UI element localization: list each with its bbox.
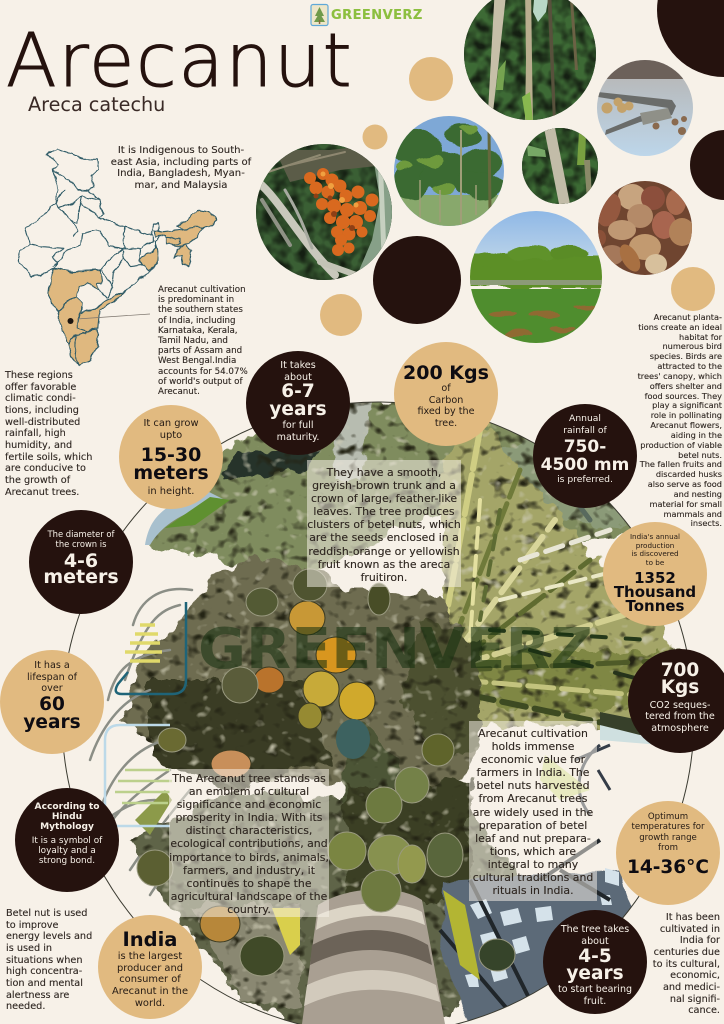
decorative dark circle top right — [657, 0, 724, 77]
stat bubble: India largest producer: producer and — [117, 963, 183, 974]
text box: cultural significance: distinct characteristics, — [186, 824, 312, 837]
stat bubble: years to bearing fruit: about — [581, 936, 609, 947]
stat bubble: annual rainfall: rainfall of — [563, 425, 607, 436]
stat bubble: crown diameter: the crown is — [56, 539, 106, 549]
stat bubble: annual production: is discovered — [631, 549, 679, 558]
text box: cultural significance — [169, 769, 329, 917]
decorative tan circle lower — [320, 294, 362, 336]
text box: trunk and fruit description: reddish-orange or yellowish — [308, 545, 460, 558]
text box: cultural significance: continues to shape the — [186, 877, 312, 890]
map: location pin and leader line — [68, 314, 150, 324]
stat bubble: annual production: Thousand — [614, 583, 696, 601]
text: cultivation regions in India: is predominant in — [158, 295, 234, 305]
stat bubble: optimum temperature: 14-36°C — [627, 857, 709, 878]
text: energy uses of betel nut: high concentra- — [6, 966, 82, 977]
text: favorable climate: well-distributed — [5, 417, 80, 428]
tree: blue-grey netted fronds lower right — [438, 712, 651, 1020]
decorative small tan circle — [362, 124, 388, 150]
watermark logo frame — [105, 602, 186, 826]
stat bubble: optimum temperature: temperatures for — [631, 822, 705, 832]
stat bubble: CO2 sequestered: 700 — [661, 660, 699, 681]
text: favorable climate: Arecanut trees. — [5, 487, 79, 498]
text: bird habitat: tions create an ideal — [638, 322, 722, 332]
stat bubble: years to full maturity: about — [284, 372, 312, 383]
text box: cultural significance: significance and economic — [177, 798, 321, 811]
text: favorable climate: These regions — [5, 370, 73, 381]
stat bubble: height — [119, 405, 223, 509]
text box: trunk and fruit description: are the seeds enclosed in a — [309, 531, 459, 544]
stat bubble: India largest producer — [98, 915, 202, 1019]
stat bubble: lifespan: 60 — [39, 694, 65, 715]
text box: cultural significance: ecological contributions, and — [170, 837, 328, 850]
stat bubble: optimum temperature — [616, 801, 720, 905]
text: cultivation regions in India: of world's output of — [158, 377, 243, 387]
stat bubble: optimum temperature: Optimum — [648, 812, 688, 822]
text: cultural history: nal signifi- — [670, 994, 720, 1005]
stat bubble: India largest producer: is the largest — [118, 951, 182, 962]
photo: palm plantation and green field — [465, 211, 605, 344]
map: unshaded states — [18, 149, 165, 313]
stat bubble: crown diameter — [29, 510, 133, 614]
stat bubble: carbon fixed: of — [441, 383, 451, 394]
text box: economic value: rituals in India. — [492, 884, 574, 897]
text: bird habitat: numerous bird — [662, 341, 722, 351]
text: bird habitat: species. Birds are — [650, 351, 722, 361]
text box: economic value: are widely used in the — [473, 806, 593, 819]
tree: lower mass of leaves — [130, 780, 520, 1024]
stat bubble: annual rainfall: is preferred. — [557, 474, 613, 485]
text: cultural history — [652, 912, 720, 1016]
stat bubble: annual rainfall: 750- — [564, 437, 606, 457]
tree: yellow accent leaves — [135, 790, 480, 980]
stat bubble: lifespan: years — [23, 712, 81, 733]
text: cultivation regions in India: the southern states — [158, 305, 243, 315]
text: favorable climate: humidity, and — [5, 440, 72, 451]
stat bubble: years to full maturity: 6-7 — [281, 381, 315, 402]
stat bubble: Hindu mythology: Mythology — [40, 822, 94, 832]
text: bird habitat: betel nuts. — [678, 450, 722, 460]
text: favorable climate: climatic condi- — [5, 393, 76, 404]
photo: tall areca trunks — [462, 0, 598, 122]
text: native range: It is Indigenous to South- — [118, 145, 244, 156]
decorative dark circle centre — [373, 236, 461, 324]
stat bubble: crown diameter: meters — [43, 566, 119, 588]
stat bubble: carbon fixed: tree. — [435, 418, 457, 429]
stat bubble: years to full maturity: It takes — [280, 360, 316, 371]
stat bubble: CO2 sequestered — [628, 649, 724, 753]
text: energy uses of betel nut — [6, 908, 92, 1012]
tree: grey-brown crown mass — [120, 558, 480, 810]
text: bird habitat: trees' canopy, which — [638, 371, 722, 381]
stat bubble: Hindu mythology: It is a symbol of — [32, 836, 102, 846]
text box: trunk and fruit description: crown of large, feather-like — [311, 492, 457, 505]
stat bubble: annual production: 1352 — [634, 569, 676, 587]
photo: split areca nuts — [593, 181, 695, 275]
text box: cultural significance: importance to birds, animals, — [169, 851, 329, 864]
stat bubble: CO2 sequestered: atmosphere — [651, 723, 709, 734]
decorative tan circle right — [671, 267, 715, 311]
decorative tan circle — [409, 57, 453, 101]
text box: cultural significance: The Arecanut tree stands as — [172, 772, 326, 785]
subtitle: scientific name: Areca catechu — [28, 93, 165, 116]
text box: trunk and fruit description: They have a smooth, — [327, 466, 441, 479]
text: cultivation regions in India: Arecanut cultivation — [158, 285, 246, 295]
stat bubble: Hindu mythology: According to — [35, 802, 99, 812]
text: cultural history: India for — [680, 935, 720, 946]
text: cultural history: economic, — [670, 970, 720, 981]
text: cultural history: to its cultural, — [653, 959, 720, 970]
stat bubble: years to bearing fruit: years — [566, 963, 624, 984]
stat bubble: annual production: production — [636, 541, 674, 550]
text: cultural history: cance. — [688, 1005, 720, 1016]
text: native range: east Asia, including parts of — [111, 157, 251, 168]
text box: economic value: tions, which are — [490, 845, 576, 858]
text box: cultural significance: prosperity in India. With its — [176, 811, 322, 824]
stat bubble: India largest producer: world. — [135, 998, 165, 1009]
stat bubble: India largest producer: consumer of — [119, 974, 181, 985]
text box: economic value: holds immense — [492, 740, 574, 753]
text: bird habitat: habitat for — [679, 332, 722, 342]
stat bubble: crown diameter: The diameter of — [48, 529, 114, 539]
india map — [18, 149, 217, 366]
text: cultivation regions in India: parts of Assam and — [158, 346, 242, 356]
text: bird habitat: production of viable — [640, 440, 722, 450]
text: favorable climate: tions, including — [5, 405, 79, 416]
logo icon — [311, 4, 328, 26]
photo: nut cracker tool with nuts — [597, 60, 693, 156]
text box: economic value — [469, 721, 597, 901]
stat bubble: annual rainfall: 4500 mm — [541, 455, 629, 475]
text: favorable climate: rainfall, high — [5, 428, 66, 439]
text: energy uses of betel nut: is used in — [6, 943, 52, 954]
stat bubble: Hindu mythology: strong bond. — [39, 856, 95, 866]
text: bird habitat: discarded husks — [656, 469, 722, 479]
text: bird habitat: offers shelter and — [650, 381, 722, 391]
tree: leaf tips on the left — [145, 490, 230, 545]
text: cultivation regions in India: Tamil Nadu, and — [158, 336, 228, 346]
tree: olive mass behind right fronds — [439, 423, 682, 730]
stat bubble: Hindu mythology — [15, 788, 119, 892]
text: bird habitat: attracted to the — [657, 361, 722, 371]
text box: trunk and fruit description: fruit known as the areca — [318, 558, 450, 571]
text: native range — [111, 145, 252, 191]
text box: economic value: betel nuts harvested — [476, 779, 590, 792]
stat bubble: years to bearing fruit: 4-5 — [578, 946, 612, 967]
stat bubble: carbon fixed — [394, 342, 498, 446]
text: favorable climate: the growth of — [5, 475, 70, 486]
text box: cultural significance: country. — [227, 903, 271, 916]
text: cultural history: centuries due — [654, 947, 720, 958]
stat bubble: years to full maturity: maturity. — [277, 432, 319, 443]
stat bubble: annual production: India's annual — [630, 532, 680, 541]
stat bubble: CO2 sequestered: Kgs — [661, 677, 699, 698]
stat bubble: Hindu mythology: Hindu — [52, 812, 82, 822]
stat bubble: height: in height. — [148, 486, 194, 497]
text: cultivation regions in India — [158, 285, 248, 397]
stat bubble: height: It can grow — [143, 418, 199, 429]
tree: top fronds — [150, 398, 640, 580]
text: bird habitat: and nesting — [674, 489, 722, 499]
stat bubble: height: upto — [160, 430, 182, 441]
stat bubble: annual rainfall: Annual — [569, 413, 601, 424]
title: Arecanut — [6, 18, 353, 104]
text: cultural history: It has been — [666, 912, 720, 923]
text: favorable climate: are conducive to — [5, 463, 86, 474]
text box: trunk and fruit description: clusters of betel nuts, which — [307, 518, 461, 531]
text: bird habitat: also serve as food — [648, 479, 722, 489]
stat bubble: years to bearing fruit: to start bearing — [558, 984, 632, 995]
stat bubble: lifespan: over — [41, 683, 63, 694]
text: bird habitat: Arecanut planta- — [654, 312, 722, 322]
text box: trunk and fruit description: leaves. The tree produces — [313, 505, 455, 518]
photo: orange areca fruit cluster — [256, 144, 395, 280]
stat bubble: years to full maturity: for full — [282, 420, 314, 431]
text box: trunk and fruit description: greyish-brown trunk and a — [312, 479, 456, 492]
stat bubble: annual production: Tonnes — [625, 597, 684, 615]
stat bubble: India largest producer: India — [123, 928, 177, 951]
text: bird habitat: play a significant — [652, 400, 722, 410]
tree: ripe and green nuts — [137, 569, 515, 976]
map: shaded cultivation states — [48, 210, 217, 366]
text: bird habitat: The fallen fruits and — [640, 459, 722, 469]
text box: trunk and fruit description: fruitiron. — [361, 571, 407, 584]
stat bubble: CO2 sequestered: CO2 seques- — [650, 700, 710, 710]
stat bubble: optimum temperature: from — [658, 843, 678, 853]
tree: ribbed trunk — [302, 889, 445, 1024]
decorative dark circle right — [690, 130, 724, 200]
text: energy uses of betel nut: Betel nut is used — [6, 908, 87, 919]
text: bird habitat: insects. — [691, 518, 722, 528]
text box: economic value: farmers in India. The — [476, 766, 590, 779]
stat bubble: crown diameter: 4-6 — [64, 550, 98, 572]
text: cultural history: and medici- — [663, 982, 720, 993]
text: cultivation regions in India: of India, including — [158, 316, 236, 326]
text: bird habitat — [638, 312, 722, 528]
stat bubble: lifespan: lifespan of — [27, 672, 77, 683]
stat bubble: optimum temperature: growth range — [639, 833, 697, 843]
stat bubble: height: meters — [133, 462, 209, 484]
stat bubble: lifespan: It has a — [34, 660, 70, 671]
text: bird habitat: role in pollinating — [651, 410, 722, 420]
tree illustration inside large circle — [90, 398, 695, 1024]
logo wordmark: GREENVERZ — [331, 8, 423, 23]
stat bubble: years to full maturity — [246, 351, 350, 455]
stat bubble: annual production — [603, 522, 707, 626]
large circle outline — [62, 402, 694, 1024]
stat bubble: carbon fixed: Carbon — [429, 395, 463, 406]
text: energy uses of betel nut: needed. — [6, 1001, 45, 1012]
stat bubble: India largest producer: Arecanut in the — [112, 986, 188, 997]
text: cultural history: cultivated in — [660, 924, 720, 935]
text: favorable climate: fertile soils, which — [5, 452, 92, 463]
text: energy uses of betel nut: situations when — [6, 955, 82, 966]
watermark brand text: GREENVERZ — [198, 617, 593, 682]
text box: cultural significance: an emblem of cultural — [189, 785, 309, 798]
text: favorable climate: offer favorable — [5, 382, 76, 393]
stat bubble: Hindu mythology: loyalty and a — [38, 846, 96, 856]
text box: economic value: preparation of betel — [479, 819, 587, 832]
text: energy uses of betel nut: to improve — [6, 920, 58, 931]
text box: cultural significance: farmers, and industry, it — [183, 864, 315, 877]
text box: economic value: from Arecanut trees — [478, 792, 587, 805]
text: favorable climate — [4, 370, 92, 498]
stat bubble: CO2 sequestered: tered from the — [645, 711, 715, 722]
stat bubble: years to bearing fruit: fruit. — [584, 996, 606, 1007]
text: cultivation regions in India: accounts for 54.07% — [158, 367, 248, 377]
stat bubble: height: 15-30 — [141, 444, 201, 466]
photo: close-up areca trunk — [522, 128, 598, 204]
text: bird habitat: food sources. They — [645, 391, 722, 401]
tree: yellow-green frond strands on the right — [446, 430, 650, 726]
text: energy uses of betel nut: tion and mental — [6, 978, 83, 989]
text box: economic value: leaf and nut prepara- — [475, 832, 591, 845]
stat bubble: annual rainfall — [533, 404, 637, 508]
text: native range: India, Bangladesh, Myan- — [117, 168, 245, 179]
stat bubble: years to bearing fruit — [543, 910, 647, 1014]
photo: palm grove against blue sky — [390, 116, 504, 226]
stat bubble: carbon fixed: fixed by the — [417, 406, 475, 417]
text: bird habitat: aiding in the — [671, 430, 722, 440]
text box: economic value: cultural traditions and — [473, 871, 593, 884]
text box: trunk and fruit description — [307, 460, 461, 587]
text: bird habitat: Arecanut flowers, — [650, 420, 722, 430]
stat bubble: lifespan — [0, 650, 104, 754]
stat bubble: years to full maturity: years — [269, 399, 327, 420]
stat bubble: carbon fixed: 200 Kgs — [403, 362, 489, 384]
stat bubble: years to bearing fruit: The tree takes — [561, 924, 629, 935]
text box: economic value: economic value for — [481, 753, 585, 766]
text: bird habitat: mammals and — [663, 509, 722, 519]
text box: economic value: integral to many — [488, 858, 578, 871]
tree: thin grey strands on the left — [90, 589, 205, 895]
text: cultivation regions in India: Arecanut. — [158, 387, 200, 397]
text box: cultural significance: agricultural landscape of the — [171, 890, 327, 903]
text: bird habitat: material for small — [650, 499, 722, 509]
text: native range: mar, and Malaysia — [135, 180, 227, 191]
text: cultivation regions in India: West Bengal.India — [158, 356, 236, 366]
stat bubble: annual production: to be — [646, 558, 664, 567]
text: cultivation regions in India: Karnataka, Kerala, — [158, 326, 238, 336]
text: energy uses of betel nut: alertness are — [6, 990, 69, 1001]
text: energy uses of betel nut: energy levels and — [6, 931, 92, 942]
text box: economic value: Arecanut cultivation — [478, 727, 588, 740]
